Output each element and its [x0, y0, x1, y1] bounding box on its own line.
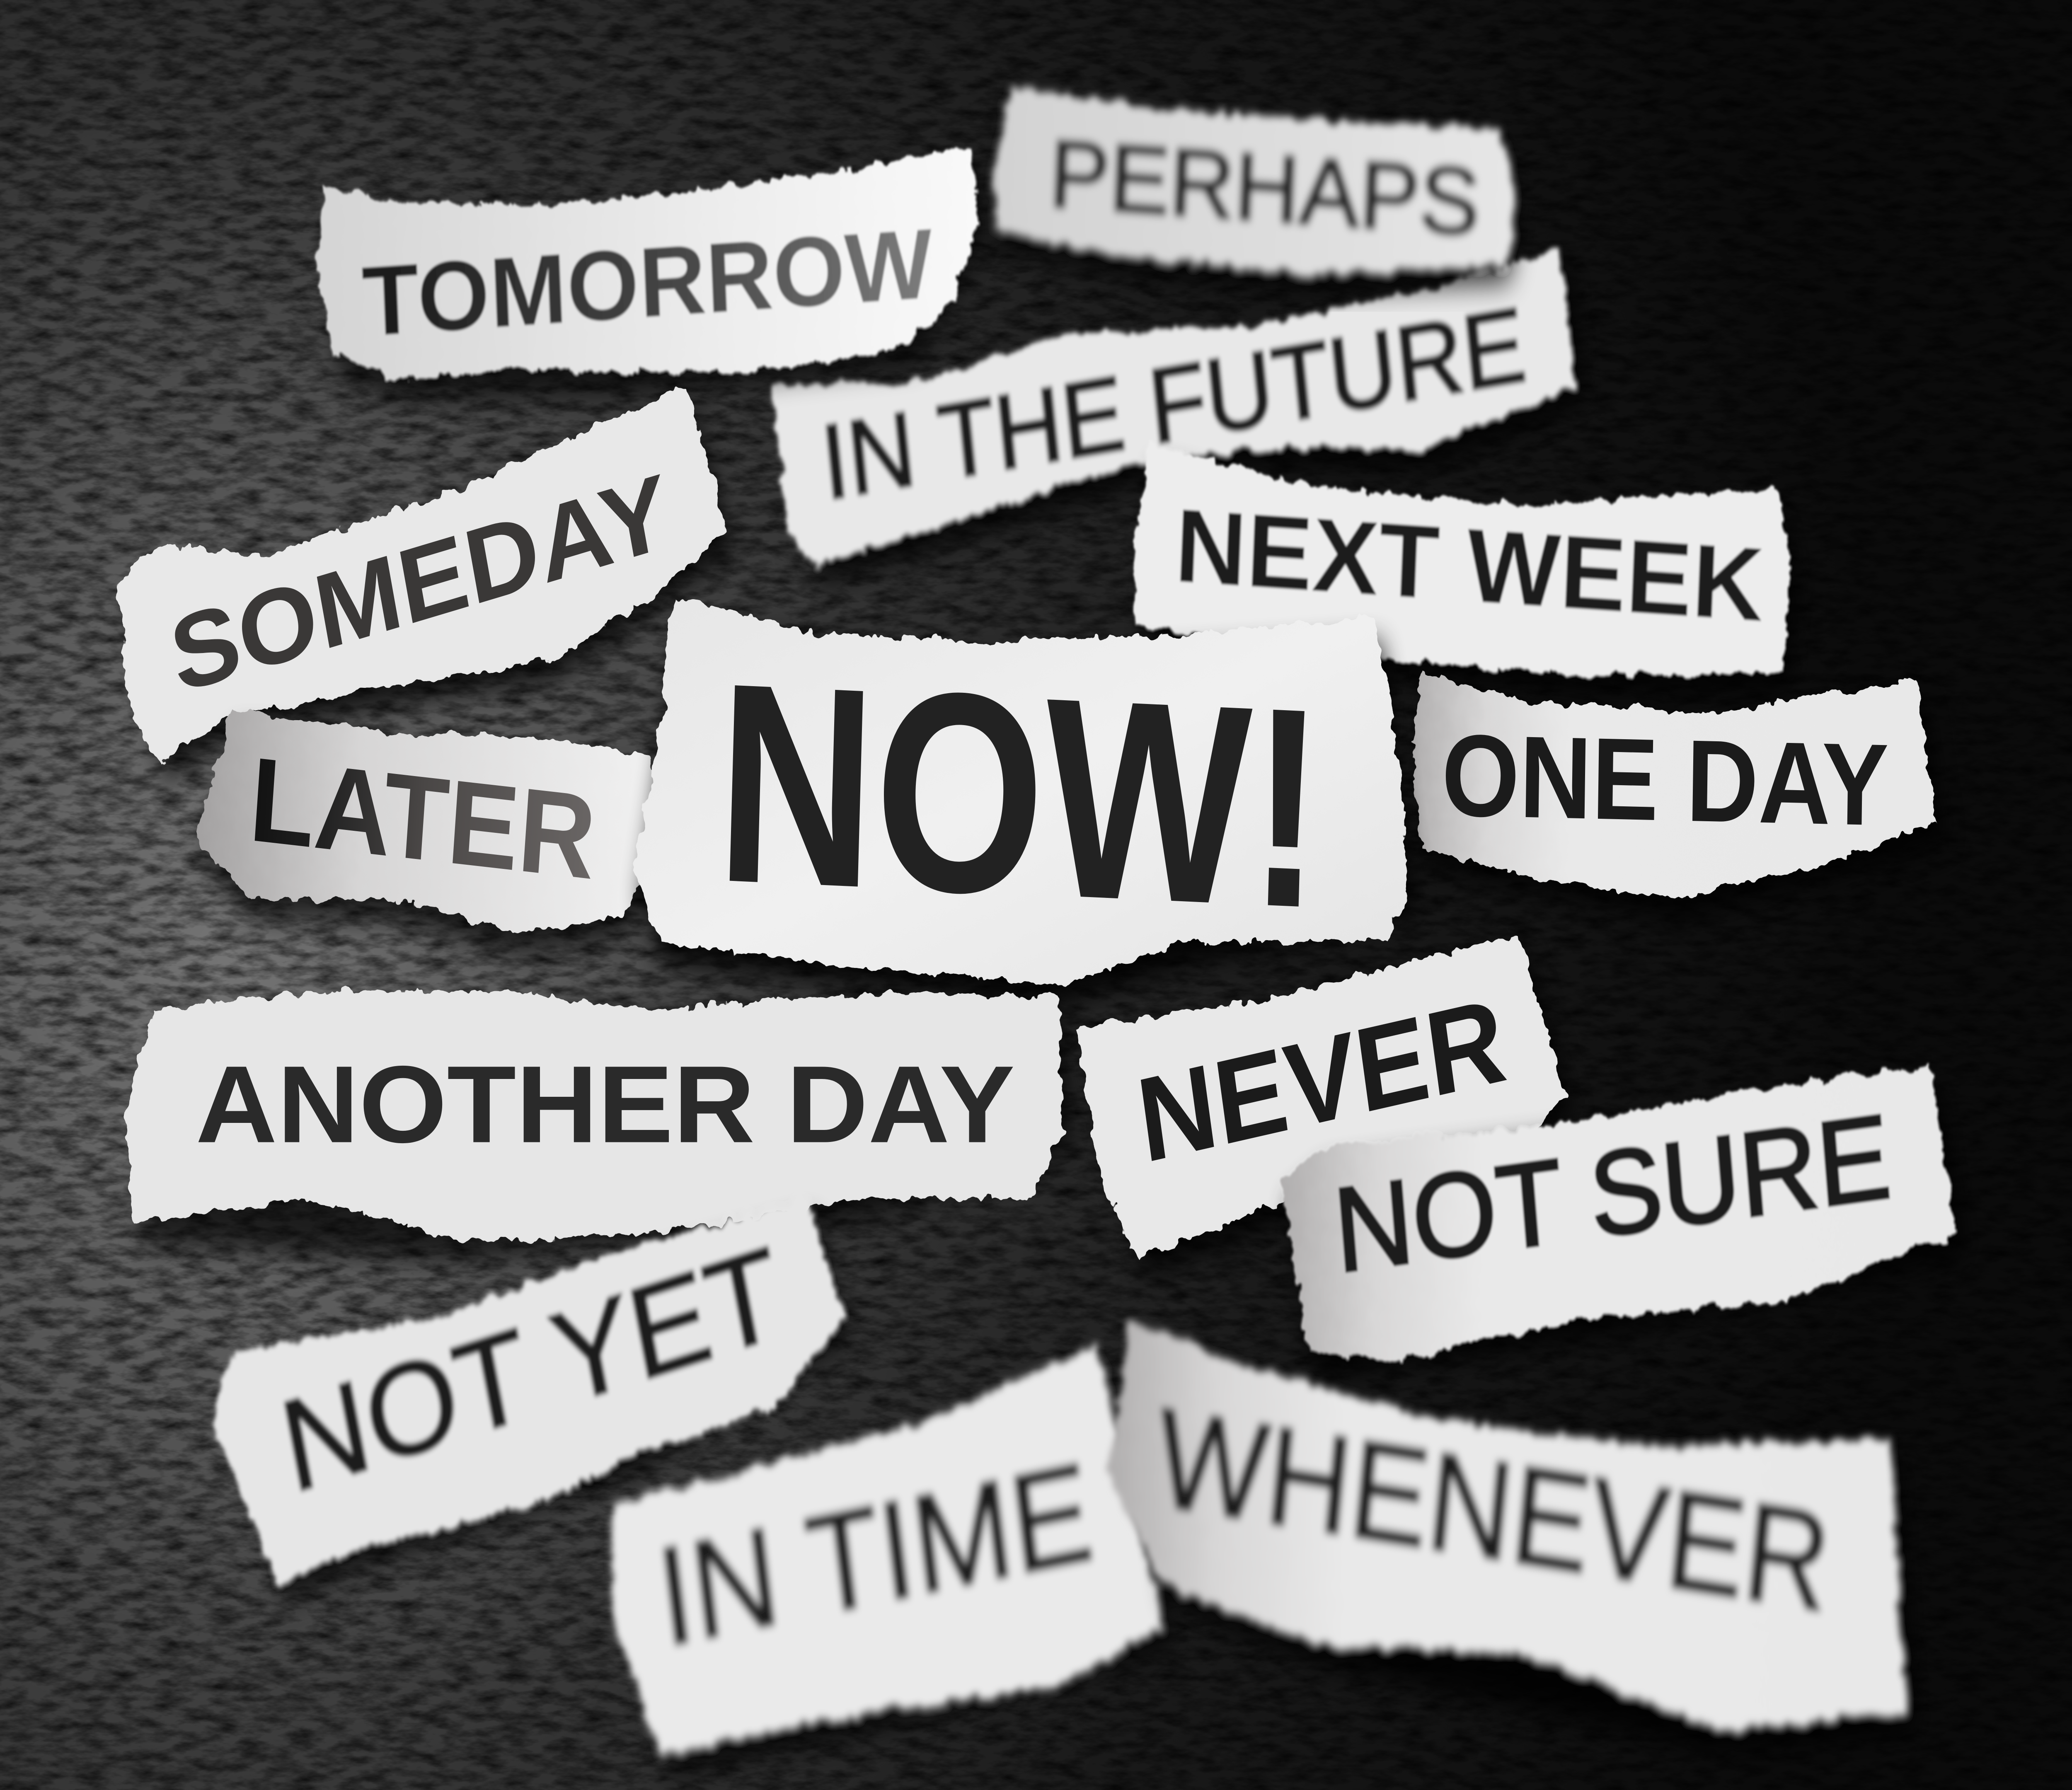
paper: NEVER [1077, 933, 1575, 1279]
paper: NEXT WEEK [1134, 445, 1800, 697]
paper: ONE DAY [1411, 671, 1945, 919]
paper: WHENEVER [1107, 1318, 1916, 1750]
text: ANOTHER DAY: ANOTHER DAY [196, 1043, 1015, 1166]
text: PERHAPS: PERHAPS [1047, 120, 1482, 256]
text: TOMORROW: TOMORROW [360, 208, 935, 358]
paper: NOT YET [211, 1199, 852, 1604]
text: NEVER: NEVER [1130, 972, 1513, 1188]
text: ONE DAY: ONE DAY [1441, 710, 1889, 850]
paper: LATER [196, 711, 674, 954]
text: WHENEVER: WHENEVER [1150, 1379, 1836, 1641]
text: NOT YET: NOT YET [271, 1219, 792, 1520]
paper: TOMORROW [317, 145, 985, 401]
paper: IN THE FUTURE [773, 248, 1586, 588]
paper: NOW! [634, 596, 1416, 1009]
text: NOT SURE: NOT SURE [1329, 1089, 1895, 1298]
paper: SOMEDAY [116, 385, 735, 783]
text: NEXT WEEK: NEXT WEEK [1173, 486, 1766, 643]
text: NOW!: NOW! [714, 623, 1327, 968]
text: IN TIME: IN TIME [650, 1433, 1099, 1676]
text: SOMEDAY: SOMEDAY [162, 452, 678, 715]
text: IN THE FUTURE: IN THE FUTURE [816, 285, 1530, 522]
paper: PERHAPS [994, 86, 1520, 291]
paper: IN TIME [610, 1344, 1174, 1776]
paper: ANOTHER DAY [126, 990, 1073, 1262]
paper: NOT SURE [1282, 1065, 1966, 1382]
text: LATER: LATER [246, 732, 600, 905]
